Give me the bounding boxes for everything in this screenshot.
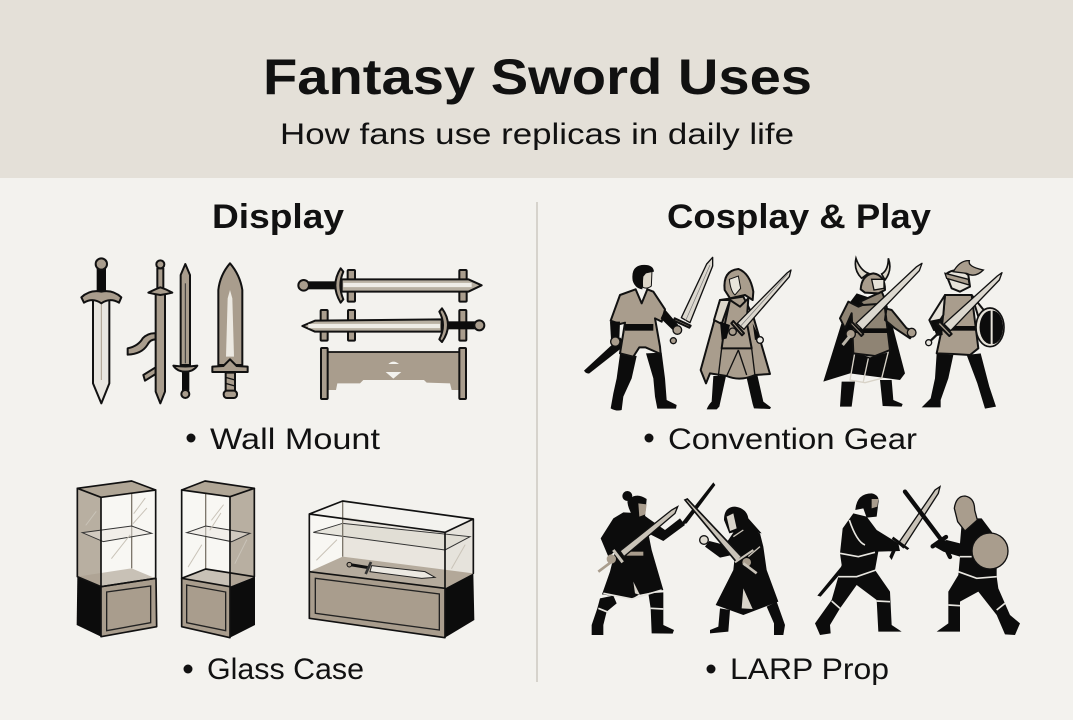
icon group: LARP fighters (592, 482, 1020, 635)
icon group: cosplay figures (584, 257, 1004, 411)
title: Fantasy Sword Uses (263, 49, 812, 105)
icon: broad sword (81, 258, 121, 403)
fighter 4 (905, 492, 950, 557)
icon: wide sword (212, 263, 248, 398)
rack base (321, 348, 466, 399)
bullet label: LARP prop: LARP Prop (730, 653, 889, 686)
icon group: glass cases (77, 481, 474, 638)
figure: woman with cape (701, 269, 791, 409)
icon: sword with strap (128, 260, 172, 403)
figure: man with swords (584, 257, 713, 411)
upper sword (298, 268, 482, 303)
icon group: wall mount swords (81, 258, 248, 403)
heading: display: Display (212, 198, 344, 236)
pair of duelists right (815, 487, 1020, 635)
lower sword (302, 308, 484, 342)
icon: tall case left (77, 481, 157, 637)
icon group: sword rack (298, 268, 484, 399)
fighter 3 (815, 513, 902, 635)
fighter 2 (705, 528, 778, 615)
bullet label: glass case: Glass Case (207, 653, 364, 686)
pair of duelists left (592, 482, 785, 635)
icon: tall case right (182, 481, 255, 638)
figure: plumed soldier with shield (922, 261, 1004, 409)
header band (0, 0, 1073, 178)
icon: slim sword (173, 264, 197, 398)
bullet label: wall mount: Wall Mount (210, 423, 381, 456)
icon: wide case with sword (309, 501, 474, 638)
figure: horned knight (823, 258, 922, 407)
bullet label: convention gear: Convention Gear (668, 423, 917, 456)
heading: cosplay and play: Cosplay & Play (667, 198, 931, 236)
fighter 1 (601, 512, 685, 599)
subtitle: How fans use replicas in daily life (280, 118, 794, 151)
